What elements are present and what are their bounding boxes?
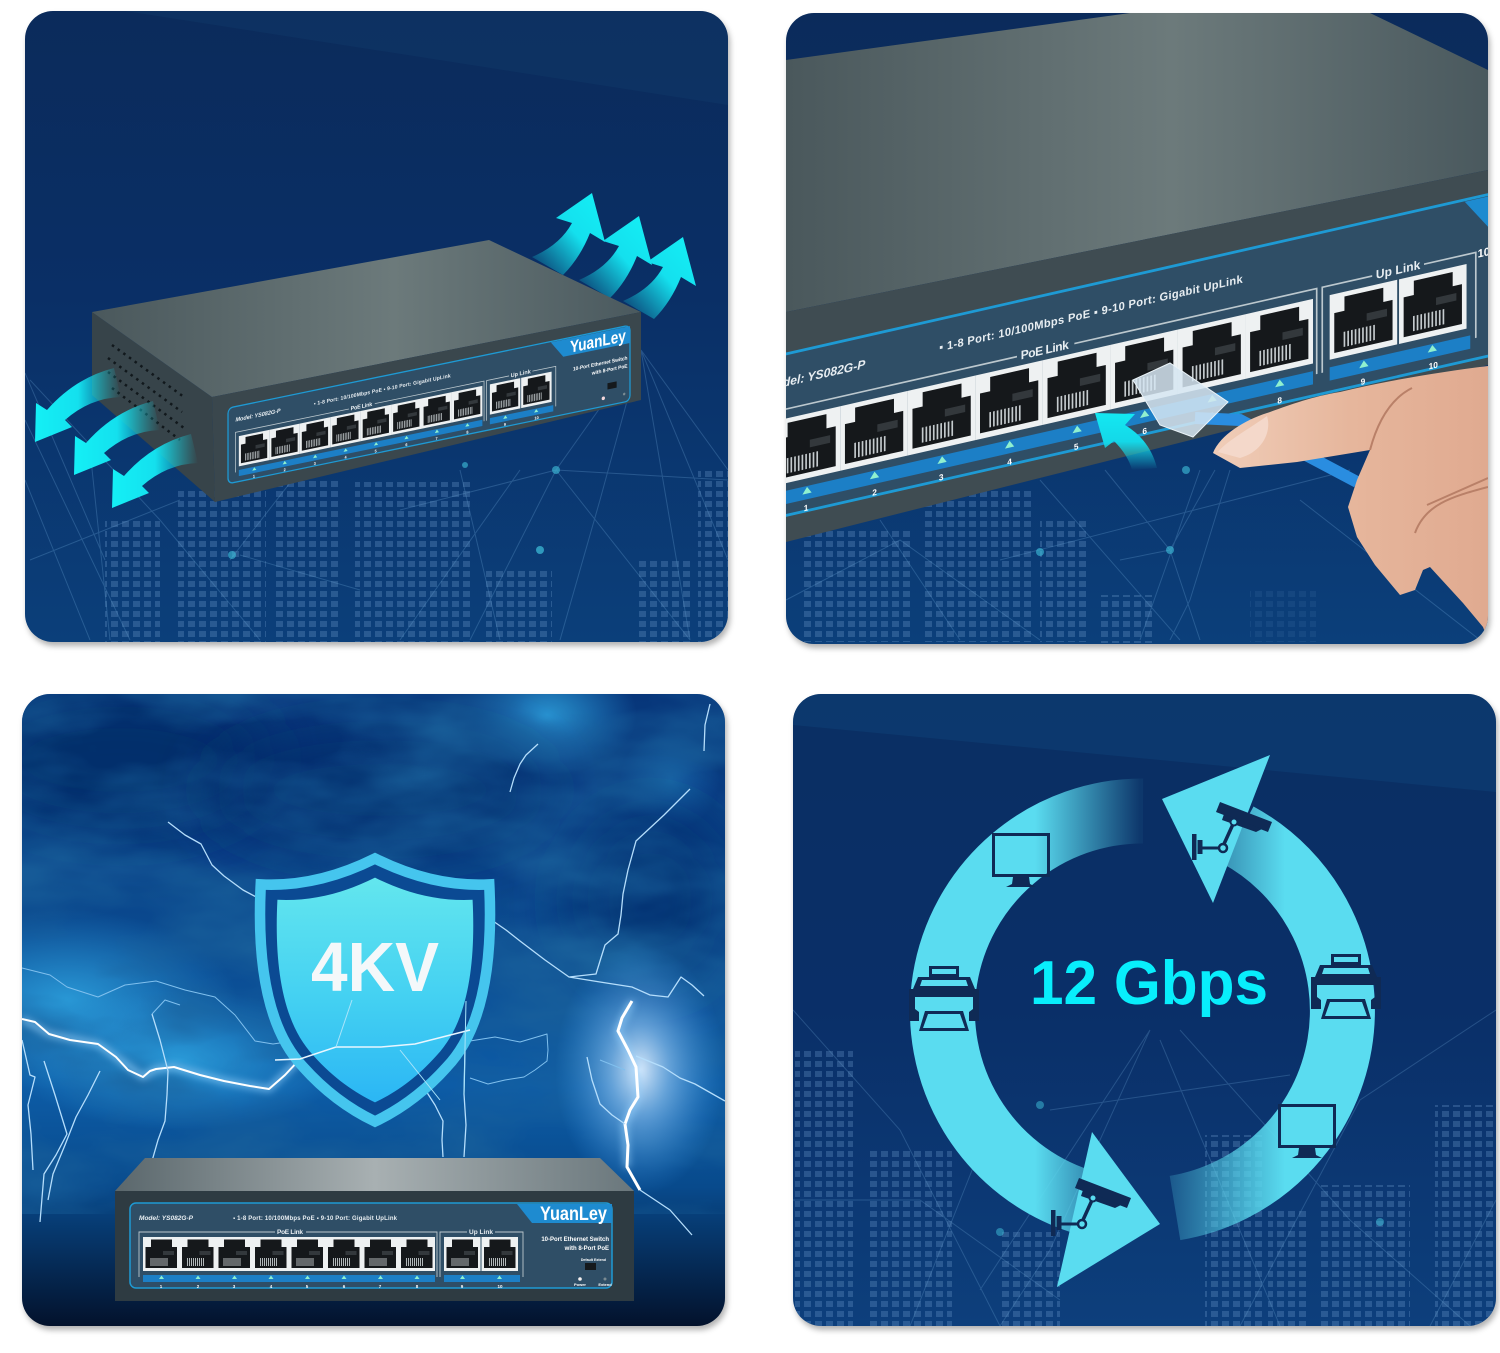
switch: front view xyxy=(115,1158,634,1301)
switch: front view: 6 xyxy=(343,1284,346,1289)
switch: close-up: 8 xyxy=(1277,395,1282,406)
switch: angled view: with 8-Port PoE xyxy=(591,363,628,377)
switch: angled view: 7 xyxy=(435,436,438,441)
switch: front view: 10-Port Ethernet Switch xyxy=(541,1237,609,1243)
switch: front view: Default Extend xyxy=(581,1258,606,1262)
switch: close-up: ▪ 1-8 Port: 10/100Mbps PoE ▪ 9-10 Port: Gigabit UpLink xyxy=(939,273,1243,354)
switch: close-up: 10 xyxy=(1478,246,1490,261)
switch: angled view: 5 xyxy=(375,448,377,454)
switch: front view: Extend xyxy=(598,1282,612,1287)
lightning glow xyxy=(22,1001,638,1167)
icon: printer right xyxy=(1311,954,1381,1019)
switch: front view: Up Link xyxy=(469,1229,493,1236)
switch: angled view: 10 xyxy=(535,415,539,421)
switch: angled view: 8 xyxy=(466,429,469,435)
switch: angled view: 1 xyxy=(253,473,256,479)
switch: angled view xyxy=(92,240,641,502)
icon: printer left xyxy=(909,966,979,1031)
arrows: cool air in xyxy=(35,368,198,508)
switch: close-up: 4 xyxy=(1007,456,1012,467)
lightning bolts xyxy=(22,704,725,1235)
speed label: 12 Gbps xyxy=(1030,949,1268,1018)
icon: camera top xyxy=(1192,802,1272,860)
switch: close-up: 10 xyxy=(1429,359,1438,372)
switch: close-up: 7 xyxy=(1209,410,1214,421)
panel: bottom-right 12 Gbps capacity xyxy=(793,694,1498,1330)
switch: front view: 9 xyxy=(461,1284,464,1289)
switch: close-up: Up Link xyxy=(1376,258,1420,282)
switch: front view: Model: YS082G-P xyxy=(139,1215,194,1222)
arrow: insertion xyxy=(1095,413,1157,470)
switch: front view: 4 xyxy=(270,1284,273,1289)
panel: top-right easy plug and play xyxy=(749,13,1500,648)
switch: close-up: 6 xyxy=(1142,425,1147,437)
switch: front view: 3 xyxy=(233,1284,236,1289)
switch: close-up xyxy=(749,13,1500,542)
switch: angled view: 4 xyxy=(345,454,347,460)
switch: close-up: 2 xyxy=(872,487,877,498)
switch: close-up: 1 xyxy=(804,502,809,513)
icon: monitor top xyxy=(992,833,1050,887)
switch: front view: with 8-Port PoE xyxy=(564,1246,609,1252)
switch: close-up: 5 xyxy=(1074,441,1079,452)
switch: front view: YuanLey xyxy=(540,1204,607,1225)
shield: 4KV xyxy=(260,858,490,1122)
city background xyxy=(793,1010,1496,1326)
switch: close-up: PoE Link xyxy=(1021,338,1069,363)
panel: top-left cooling xyxy=(25,11,730,646)
switch: angled view: Up Link xyxy=(511,369,532,379)
switch: front view: 8 xyxy=(416,1284,419,1289)
switch: angled view: 2 xyxy=(284,467,287,472)
city background xyxy=(786,466,1480,643)
switch: angled view: PoE Link xyxy=(351,402,373,412)
storm clouds xyxy=(0,655,730,1214)
switch: front view: 7 xyxy=(379,1284,382,1289)
switch: angled view: ▪ 1-8 Port: 10/100Mbps PoE ▪ 9-10 Port: Gigabit UpLink xyxy=(314,373,451,408)
switch: angled view: Model: YS082G-P xyxy=(236,408,281,424)
icon: monitor bottom xyxy=(1278,1104,1336,1158)
shield: 4KV: 4KV xyxy=(311,928,439,1006)
city background xyxy=(25,350,728,642)
switch: angled view: 6 xyxy=(405,442,408,447)
switch: angled view: 10-Port Ethernet Switch xyxy=(573,355,627,373)
icon: camera bottom xyxy=(1051,1178,1131,1236)
switch: close-up: 3 xyxy=(939,472,944,483)
switch: front view: 10 xyxy=(497,1284,503,1289)
arrows: hot air out xyxy=(532,193,696,319)
switch: close-up: 9 xyxy=(1361,376,1366,387)
arrow ring xyxy=(942,755,1342,1287)
switch: angled view: YuanLey xyxy=(570,326,626,357)
switch: angled view: 9 xyxy=(504,421,507,427)
switch: front view: PoE Link xyxy=(277,1229,303,1236)
hand xyxy=(1213,366,1488,640)
switch: close-up: Model: YS082G-P xyxy=(765,357,866,394)
cable plug xyxy=(1133,363,1357,482)
switch: front view: 2 xyxy=(197,1284,200,1289)
panel: bottom-left surge protection xyxy=(0,655,730,1330)
switch: front view: ▪ 1-8 Port: 10/100Mbps PoE ▪ 9-10 Port: Gigabit UpLink xyxy=(233,1216,398,1222)
switch: front view: 1 xyxy=(160,1284,163,1289)
switch: front view: 5 xyxy=(306,1284,309,1289)
switch: angled view: 3 xyxy=(314,461,317,466)
switch: front view: Power xyxy=(574,1282,586,1287)
